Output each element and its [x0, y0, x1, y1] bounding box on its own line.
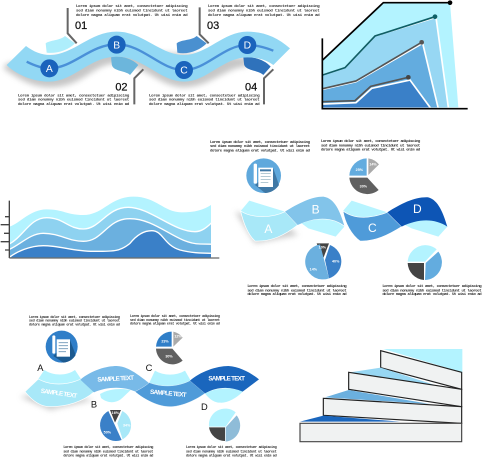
shadow ribbon A [235, 212, 298, 243]
text block 04: dolore magna aliquam erat volutpat. Ut wisi enim ad [149, 102, 260, 107]
ribbon shadow [20, 390, 93, 410]
text block B: sed diam nonummy nibh euismod tincidunt ut laoreet [63, 449, 153, 454]
ribbon segment C: SAMPLE TEXT [150, 389, 187, 399]
ribbon A [241, 211, 298, 241]
area layer 2 [320, 17, 448, 113]
pie chart 40/14/10: 40% [332, 260, 340, 264]
icon: document badge [246, 158, 281, 193]
leader line 01 [68, 8, 77, 43]
text block top right: dolore magna aliquam erat volutpat. Ut wisi enim ad [321, 148, 421, 153]
series line 4 [323, 75, 411, 102]
text block 03 [208, 4, 320, 18]
number 02: 02 [115, 81, 128, 93]
text block A: Lorem ipsum dolor sit amet, consectetuer adipiscing [29, 315, 120, 320]
step 3 [323, 398, 462, 423]
pie chart B: 50% [104, 430, 112, 434]
tab 04 [243, 57, 271, 75]
text block A [29, 315, 120, 328]
marker C: C [180, 66, 188, 77]
step 4 [300, 423, 462, 442]
pie chart C: 30% [165, 354, 173, 358]
ribbon segment B [80, 366, 149, 392]
pie chart B: 16% [112, 411, 120, 415]
icon: document badge [46, 331, 78, 363]
text block C: dolore magna aliquam erat volutpat. Ut wisi enim ad [130, 322, 220, 327]
text block 03: Lorem ipsum dolor sit amet, consectetuer adipiscing [208, 4, 320, 9]
ribbon B [285, 197, 344, 226]
pie chart 40/14/10: 10% [319, 246, 327, 250]
panel: stacked wave chart [1, 197, 219, 263]
area layer 3 [323, 44, 439, 108]
marker D: D [244, 41, 251, 52]
text block 04: Lorem ipsum dolor sit amet, consectetuer adipiscing [149, 93, 260, 98]
number 04: 04 [245, 81, 257, 93]
marker B: B [113, 40, 120, 51]
text block bottom left: Lorem ipsum dolor sit amet, consectetuer adipiscing [247, 284, 347, 289]
ribbon segment A [25, 379, 94, 407]
marker A [40, 59, 58, 77]
pie chart C [156, 332, 183, 364]
ribbon segment D: SAMPLE TEXT [208, 376, 245, 383]
text block top right: sed diam nonummy nibh euismod tincidunt ut laoreet [321, 144, 421, 149]
marker B [108, 36, 126, 54]
text block top left: Lorem ipsum dolor sit amet, consectetuer adipiscing [210, 140, 311, 145]
ribbon segment A: SAMPLE TEXT [40, 388, 78, 400]
wave layer 2 [10, 206, 211, 248]
area layers [320, 3, 458, 113]
horizontal axis [9, 256, 219, 260]
text block 02 [18, 93, 130, 107]
text block 04: sed diam nonummy nibh euismod tincidunt ut laoreet [149, 98, 260, 103]
ribbon D: D [413, 202, 422, 216]
text block top left [210, 140, 311, 153]
flap below B [100, 389, 131, 402]
panel: wavy ribbon timeline 01-04 [3, 4, 320, 107]
ribbon shadow [3, 50, 247, 87]
ribbon C: C [368, 221, 377, 235]
pie chart 25/30: 25% [356, 168, 364, 172]
flap below D [205, 388, 243, 403]
series line 2 [323, 14, 437, 75]
series line 3 [323, 40, 424, 89]
text block B: Lorem ipsum dolor sit amet, consectetuer adipiscing [63, 445, 153, 450]
number 01: 01 [75, 20, 87, 32]
wave layers [10, 196, 211, 258]
pie chart 40/14/10: 14% [310, 267, 318, 271]
text block A: dolore magna aliquam erat volutpat. Ut wisi enim ad [29, 323, 120, 328]
leader line 02 [134, 69, 143, 104]
panel: stair chart [300, 349, 462, 442]
flap 2 [350, 368, 440, 387]
pie chart D [209, 409, 240, 442]
marker C [175, 61, 193, 79]
text block 02: Lorem ipsum dolor sit amet, consectetuer adipiscing [18, 93, 130, 98]
text block 03: dolore magna aliquam erat volutpat. Ut wisi enim ad [208, 13, 320, 18]
text block 03: sed diam nonummy nibh euismod tincidunt ut laoreet [208, 9, 320, 14]
panel: ribbons A-D with pies, upper right [210, 139, 482, 297]
letter D: D [201, 402, 208, 412]
marker A: A [46, 64, 53, 75]
ribbon A: A [264, 222, 272, 236]
area layer 4 [323, 79, 431, 108]
pie chart B [100, 410, 131, 441]
text block D: sed diam nonummy nibh euismod tincidunt ut laoreet [186, 449, 277, 454]
flap 3 [325, 390, 430, 404]
step 2 [349, 372, 462, 407]
pie chart 25/30 [349, 158, 379, 194]
text block 01: dolore magna aliquam erat volutpat. Ut wisi enim ad [76, 13, 188, 18]
number 03: 03 [207, 20, 219, 32]
text block bottom left [247, 284, 347, 297]
text block A: sed diam nonummy nibh euismod tincidunt ut laoreet [29, 319, 120, 324]
letter A: A [37, 363, 44, 373]
ribbon segment D [190, 366, 259, 393]
ribbon band [7, 32, 290, 82]
pie chart 25/30: 30% [360, 184, 368, 188]
wave layer 1 [10, 196, 211, 243]
text block 02: sed diam nonummy nibh euismod tincidunt ut laoreet [18, 98, 130, 103]
panel: sample text ribbon with pies, lower left [20, 314, 277, 458]
flap below D [405, 220, 447, 237]
text block D: Lorem ipsum dolor sit amet, consectetuer adipiscing [186, 445, 277, 450]
text block 01 [76, 4, 188, 18]
text block top left: dolore magna aliquam erat volutpat. Ut wisi enim ad [210, 148, 311, 153]
flap above A [38, 370, 81, 384]
text block bottom right: dolore magna aliquam erat volutpat. Ut wisi enim ad [382, 292, 482, 297]
text block bottom right: sed diam nonummy nibh euismod tincidunt ut laoreet [382, 288, 482, 293]
text block top left: sed diam nonummy nibh euismod tincidunt ut laoreet [210, 144, 311, 149]
ribbon segment C [135, 381, 205, 407]
text block C [130, 314, 220, 327]
text block 01: sed diam nonummy nibh euismod tincidunt ut laoreet [76, 9, 188, 14]
flap 4 [300, 416, 400, 422]
leader line 04 [264, 69, 273, 104]
flap above C [343, 201, 387, 217]
text block C: sed diam nonummy nibh euismod tincidunt ut laoreet [130, 318, 220, 323]
text block bottom right [382, 284, 482, 297]
flap above A [241, 201, 285, 217]
ribbon B: B [312, 203, 320, 217]
pie chart three segments [408, 245, 442, 280]
text block bottom right: Lorem ipsum dolor sit amet, consectetuer adipiscing [382, 284, 482, 289]
text block 02: dolore magna aliquam erat volutpat. Ut wisi enim ad [18, 102, 130, 107]
letter C: C [146, 363, 153, 373]
ribbon segment B: SAMPLE TEXT [97, 375, 134, 384]
area layer 1 [320, 3, 458, 113]
letter B: B [91, 400, 97, 410]
panel: layered area chart [320, 0, 468, 113]
pie chart 25/30: 14% [369, 163, 377, 167]
flap 1 [383, 349, 462, 372]
wave layer 3 [10, 218, 211, 256]
pie chart C: 12% [174, 334, 182, 338]
tab 03 [177, 36, 207, 53]
text block top right: Lorem ipsum dolor sit amet, consectetuer adipiscing [321, 139, 421, 144]
text block C: Lorem ipsum dolor sit amet, consectetuer adipiscing [130, 314, 220, 319]
axes and ticks [1, 201, 9, 258]
tab 01 [46, 36, 75, 53]
ribbon D [387, 197, 447, 227]
pie chart 40/14/10 [305, 243, 341, 279]
tab 02 [111, 57, 138, 75]
flap below B [302, 219, 344, 237]
text block bottom left: dolore magna aliquam erat volutpat. Ut wisi enim ad [247, 292, 347, 297]
flap above C [149, 371, 191, 386]
axes [322, 38, 468, 109]
pie chart B: 34% [123, 423, 131, 427]
series line 1 [323, 0, 452, 60]
leader line 03 [200, 7, 209, 43]
ribbon centre line [27, 44, 273, 70]
wave layer 4 [10, 230, 211, 258]
text block 01: Lorem ipsum dolor sit amet, consectetuer adipiscing [76, 4, 188, 9]
pie chart C: 23% [161, 340, 169, 344]
marker D [238, 36, 256, 54]
text block B [63, 445, 153, 458]
text block D [186, 445, 277, 458]
text block top right [321, 139, 421, 153]
text block bottom left: sed diam nonummy nibh euismod tincidunt ut laoreet [247, 288, 347, 293]
ribbon C [343, 211, 402, 241]
text block 04 [149, 93, 260, 107]
step 1 [381, 351, 462, 389]
